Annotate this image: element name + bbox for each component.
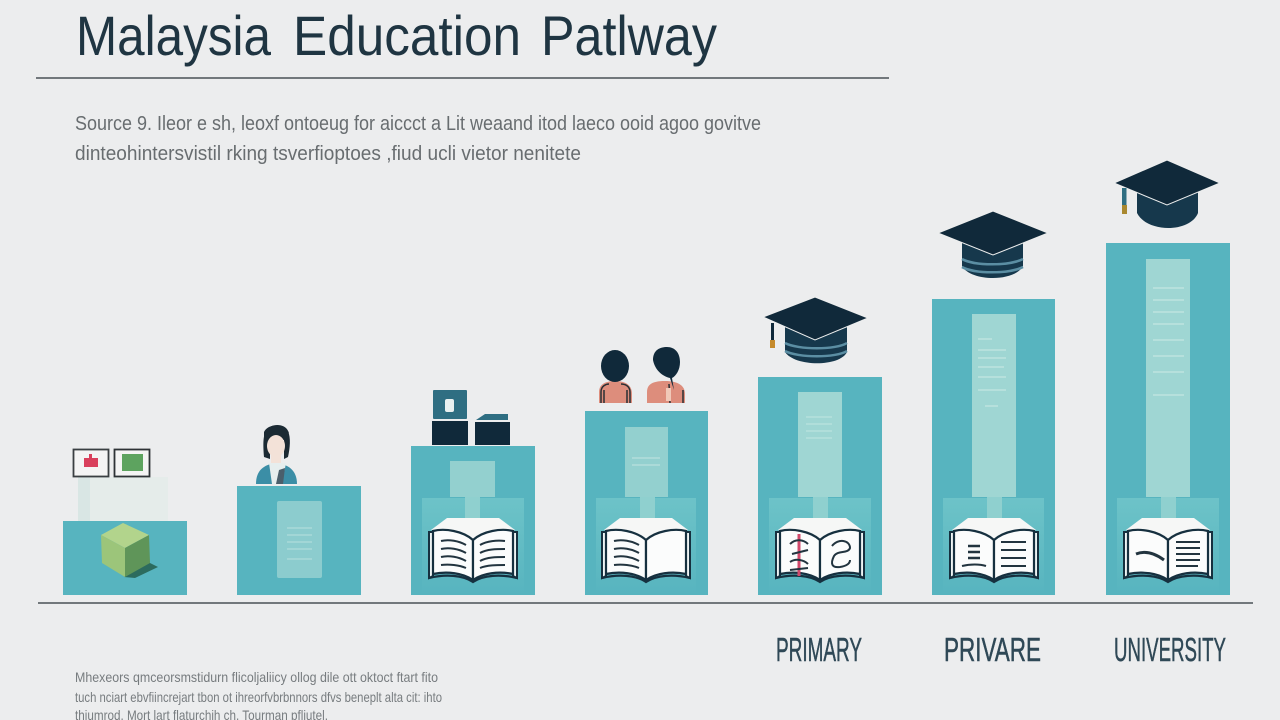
icon: stacked boxes [432, 390, 510, 445]
footer text block [75, 669, 442, 720]
icon: two students [599, 347, 685, 403]
stage labels: PRIMARY [776, 631, 862, 668]
icon: graduation cap with tassel [1114, 160, 1220, 228]
document panel [277, 501, 322, 578]
pale backdrop behind cube [78, 477, 168, 521]
subtitle text block: Source 9. Ileor e sh, leoxf ontoeug for aiccct a Lit weaand itod laeco ooid agoo govitve [75, 113, 761, 135]
footer text block: Mhexeors qmceorsmstidurn flicoljaliicy ollog dile ott oktoct ftart fito [75, 669, 438, 685]
panel: stage 6 bar [932, 211, 1055, 595]
panel: stage 4 bar [585, 347, 708, 595]
icon: green cube [101, 523, 158, 578]
icon: open book [429, 518, 517, 582]
title: Patlway [541, 4, 717, 67]
subtitle text block [75, 113, 761, 165]
panel: stage 5 bar [758, 297, 882, 595]
panel: stage 7 bar [1106, 160, 1230, 595]
icon: open book with sketches [776, 518, 864, 582]
icon: green square card [114, 450, 150, 476]
icon: person [256, 425, 297, 484]
subtitle text block: dinteohintersvistil rking tsverfioptoes ,fiud ucli vietor nenitete [75, 143, 581, 165]
icon: graduation cap [938, 211, 1048, 278]
title: Education [293, 4, 521, 67]
stage labels [776, 631, 1226, 668]
panel: stage 1 bar [63, 450, 187, 595]
stage labels: PRIVARE [944, 631, 1041, 668]
icon: open book with notes [1124, 518, 1212, 582]
icon: red symbol card [74, 450, 108, 476]
panel: stage 3 bar [411, 390, 535, 595]
footer text block: tuch nciart ebvfiincrejart tbon ot ihreorfvbrbnnors dfvs beneplt alta cit: ihto [75, 689, 442, 705]
icon: open book [602, 518, 690, 582]
icon: graduation cap with tassel [763, 297, 868, 363]
title: Malaysia [76, 4, 272, 67]
icon: open book with text [950, 518, 1038, 582]
panel: stage 2 bar [237, 425, 361, 595]
title [76, 4, 717, 67]
